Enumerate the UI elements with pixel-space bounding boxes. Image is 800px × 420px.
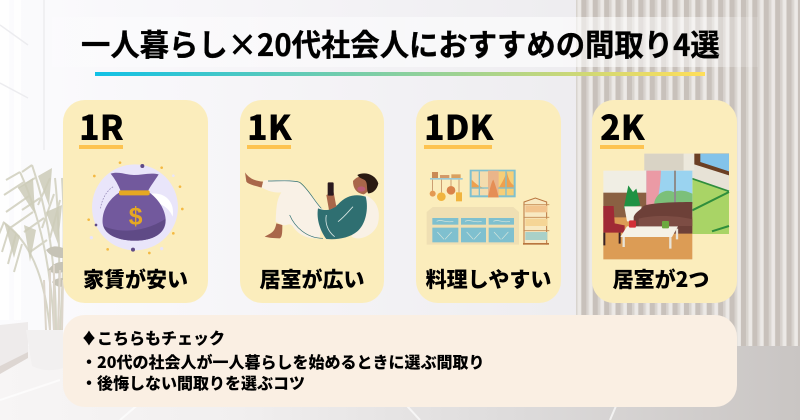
link: 20代の社会人: ・20代の社会人が一人暮らしを始めるときに選ぶ間取り: [81, 349, 484, 373]
label: 居室が広い: 居室が広い: [260, 264, 364, 294]
heading: 2K: 2K: [600, 101, 645, 150]
heading: こちらもチェック: ♦こちらもチェック: [81, 325, 225, 349]
panel: 1K: [240, 100, 384, 303]
label: 家賃が安い: 家賃が安い: [83, 264, 188, 294]
panel: 1R: [63, 100, 208, 303]
icon: money bag: $: [129, 203, 143, 230]
plant: [0, 165, 64, 370]
illustration: two rooms: [603, 154, 730, 260]
panel: 1DK: [416, 100, 561, 303]
gradient underline: [95, 72, 705, 76]
illustration: kitchen: [426, 170, 550, 245]
title: 一人暮らし×20代社会人におすすめの間取り4選: [81, 21, 720, 65]
illustration: person lying with phone: [245, 172, 379, 240]
icon: money bag: [87, 161, 184, 254]
panel: こちらもチェック: [63, 315, 737, 407]
title band: [52, 17, 758, 67]
panel: 2K: [592, 100, 737, 303]
heading: 1K: 1K: [247, 101, 292, 150]
label: 料理しやすい: 料理しやすい: [426, 264, 551, 294]
link: 後悔しない間取り: ・後悔しない間取りを選ぶコツ: [81, 370, 305, 394]
label: 居室が2つ: 居室が2つ: [613, 264, 709, 294]
heading: 1R: 1R: [79, 101, 124, 150]
heading: 1DK: 1DK: [424, 101, 494, 150]
